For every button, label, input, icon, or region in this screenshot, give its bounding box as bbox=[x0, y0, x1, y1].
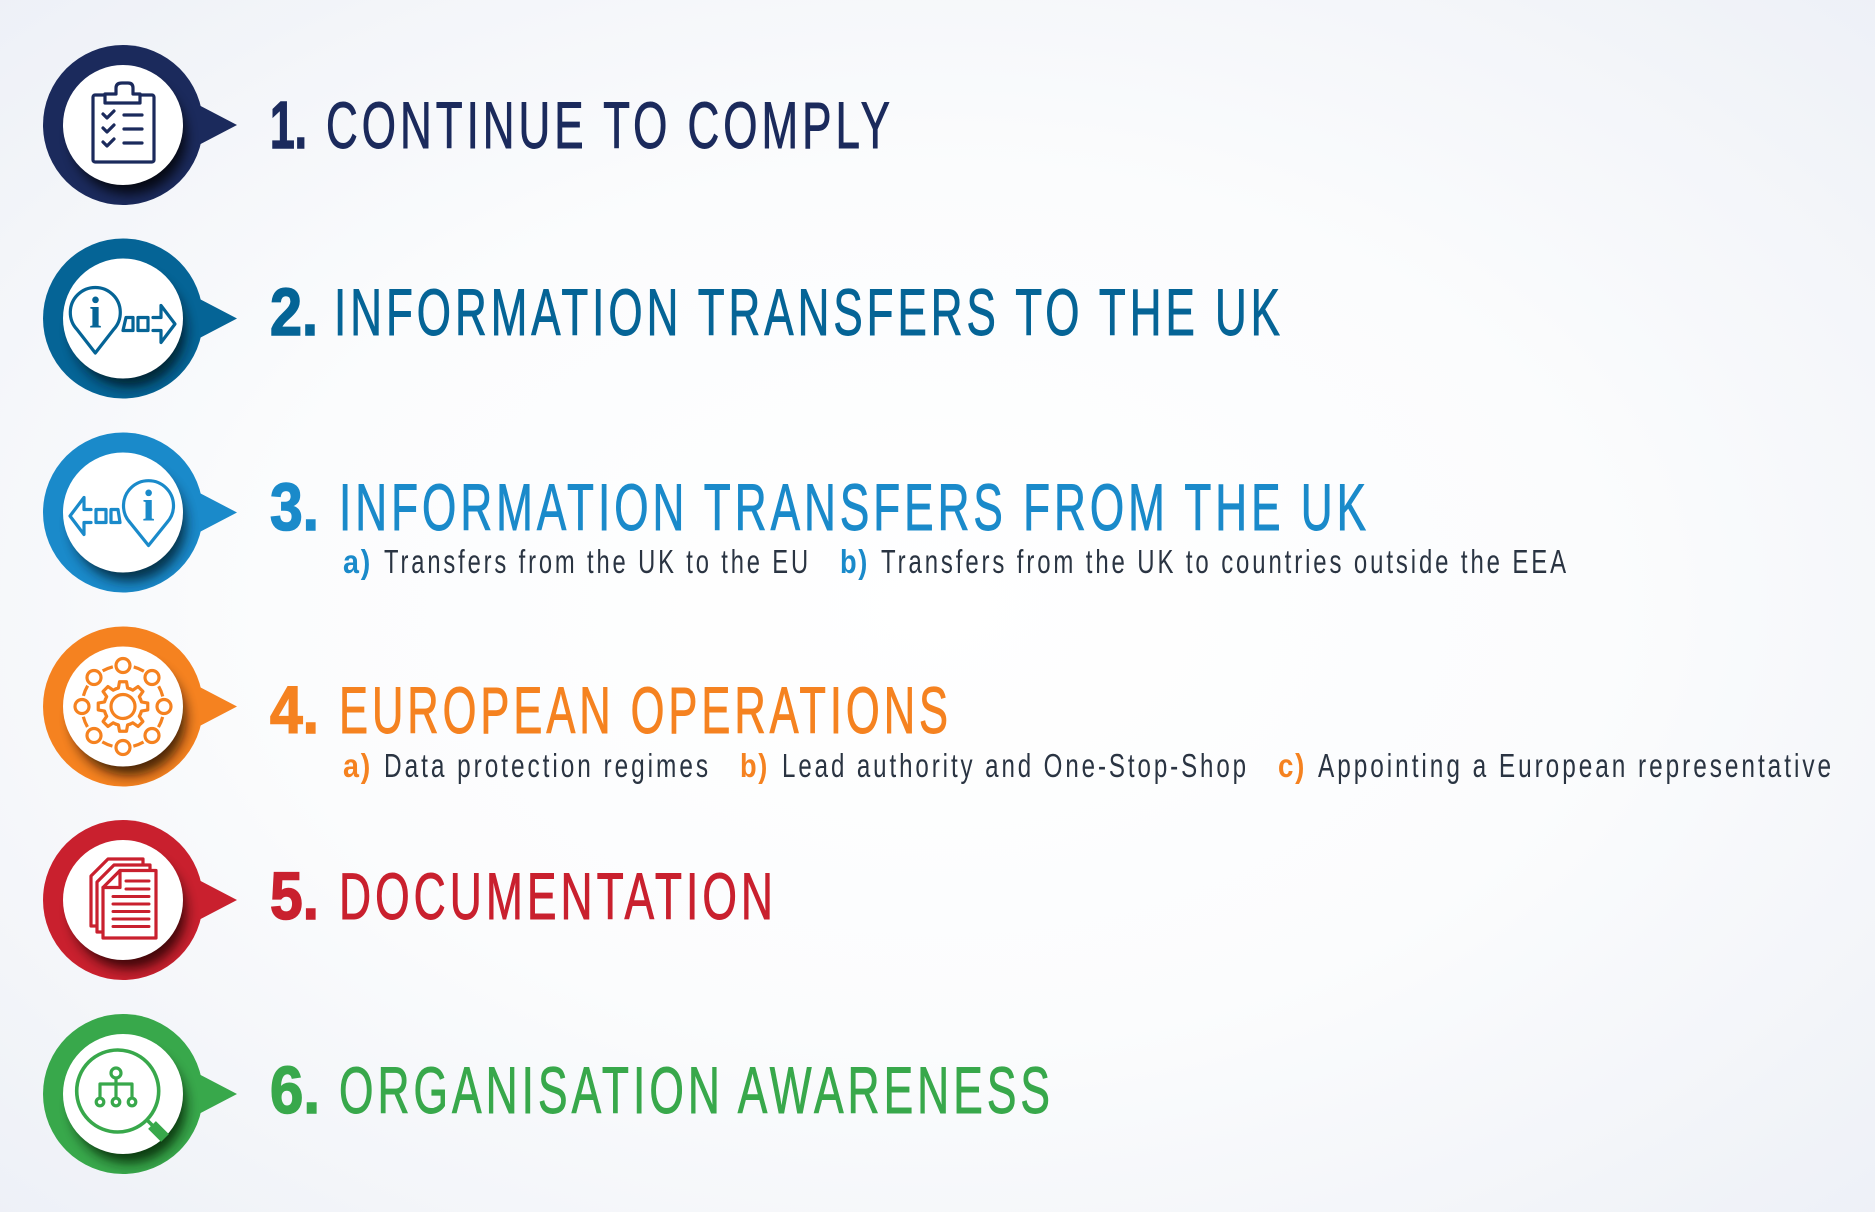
step 5: documentation bbox=[43, 820, 777, 980]
marker 2 bbox=[43, 238, 237, 398]
marker 3 bbox=[43, 432, 237, 592]
icon: clipboard checklist bbox=[93, 83, 154, 162]
heading 6: ORGANISATION AWARENESS bbox=[339, 1053, 1054, 1127]
heading 5: 5. bbox=[270, 859, 319, 934]
heading 6: 6. bbox=[270, 1053, 320, 1128]
marker 6 bbox=[43, 1014, 237, 1174]
subpoints 4: c) bbox=[1278, 747, 1306, 784]
marker 1 bbox=[43, 45, 237, 205]
heading 4: EUROPEAN OPERATIONS bbox=[339, 673, 952, 747]
heading 2: 2. bbox=[270, 275, 318, 350]
heading 5 bbox=[270, 859, 777, 934]
heading 3: INFORMATION TRANSFERS FROM THE UK bbox=[339, 470, 1370, 544]
heading 3: 3. bbox=[270, 470, 319, 545]
subpoints 4: Data protection regimes bbox=[384, 747, 711, 784]
heading 1: 1. bbox=[270, 88, 307, 163]
heading 1 bbox=[270, 88, 894, 163]
icon: information pin with right arrow bbox=[70, 287, 175, 353]
icon: magnifier over org chart bbox=[77, 1050, 165, 1138]
subpoints 3: a) bbox=[343, 543, 372, 580]
icon: information pin with left arrow: i bbox=[142, 482, 155, 530]
marker 5 bbox=[43, 820, 237, 980]
icon: information pin with left arrow bbox=[70, 481, 174, 546]
subpoints 4: b) bbox=[740, 747, 769, 784]
subpoints 3: Transfers from the UK to countries outside the EEA bbox=[881, 543, 1569, 580]
heading 4: 4. bbox=[270, 673, 319, 748]
subpoints 4 bbox=[343, 747, 1834, 784]
icon: gear with network ring bbox=[75, 658, 171, 754]
heading 5: DOCUMENTATION bbox=[339, 859, 777, 933]
heading 4 bbox=[270, 673, 952, 748]
step 3: information transfers from the UK bbox=[43, 432, 1569, 592]
heading 1: CONTINUE TO COMPLY bbox=[326, 88, 894, 162]
step 1: continue to comply bbox=[43, 45, 894, 205]
icon: information pin with right arrow: i bbox=[89, 288, 101, 338]
subpoints 3 bbox=[343, 543, 1569, 580]
step 4: european operations bbox=[43, 626, 1834, 786]
marker 4 bbox=[43, 626, 237, 786]
step 2: information transfers to the UK bbox=[43, 238, 1284, 398]
subpoints 4: Lead authority and One-Stop-Shop bbox=[782, 747, 1249, 784]
step 6: organisation awareness bbox=[43, 1014, 1054, 1174]
subpoints 3: Transfers from the UK to the EU bbox=[384, 543, 811, 580]
icon: stacked documents bbox=[91, 859, 156, 938]
heading 2 bbox=[270, 275, 1284, 350]
subpoints 4: a) bbox=[343, 747, 372, 784]
heading 6 bbox=[270, 1053, 1054, 1128]
subpoints 3: b) bbox=[840, 543, 869, 580]
heading 3 bbox=[270, 470, 1370, 545]
heading 2: INFORMATION TRANSFERS TO THE UK bbox=[334, 275, 1284, 349]
